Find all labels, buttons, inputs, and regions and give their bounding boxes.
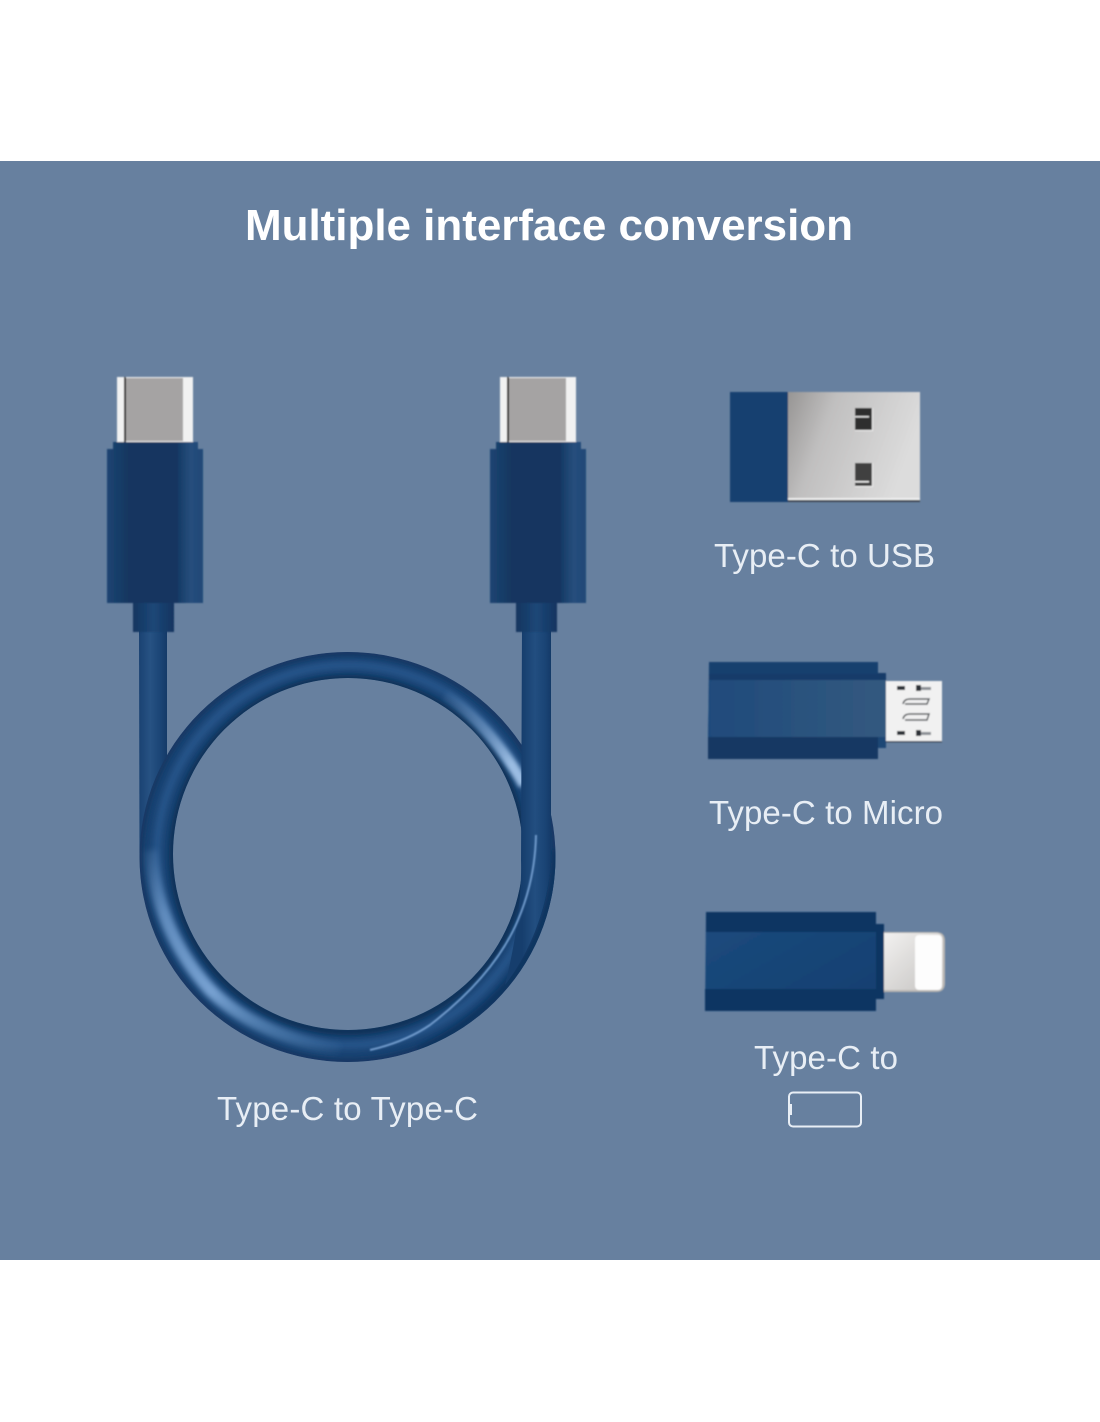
connector: right Type-C plug <box>490 377 586 632</box>
title: Multiple interface conversion <box>245 201 853 250</box>
label: Type-C to: Type-C to <box>754 1039 898 1076</box>
lightning step <box>876 924 884 999</box>
adapter: USB <box>730 392 920 502</box>
label: Type-C to USB: Type-C to USB <box>714 537 935 574</box>
background panel <box>0 161 1100 1260</box>
micro body <box>708 662 878 759</box>
right cable strand <box>505 628 551 985</box>
adapter: Lightning <box>705 912 945 1011</box>
USB blue body <box>730 392 788 502</box>
label: Type-C to Micro: Type-C to Micro <box>709 794 943 831</box>
icon: phone outline <box>789 1092 861 1126</box>
cable highlight line <box>370 835 536 1050</box>
metal tip <box>500 377 576 442</box>
plug body <box>107 442 203 603</box>
cable loop <box>140 652 556 1062</box>
plug neck <box>516 603 557 632</box>
plug neck <box>133 603 174 632</box>
cable: Type-C to Type-C <box>107 377 586 1062</box>
metal tip <box>117 377 193 442</box>
micro metal tip <box>886 681 942 741</box>
lightning body <box>705 912 876 1011</box>
USB slots <box>855 408 873 431</box>
lightning metal tip <box>883 932 945 992</box>
micro contacts <box>897 685 931 736</box>
USB metal shell <box>787 392 920 502</box>
micro step <box>878 673 886 748</box>
label: Type-C to Type-C: Type-C to Type-C <box>217 1090 478 1127</box>
adapter: Micro USB <box>708 662 942 759</box>
plug body <box>490 442 586 603</box>
connector: left Type-C plug <box>107 377 203 632</box>
left cable strand <box>139 628 167 857</box>
